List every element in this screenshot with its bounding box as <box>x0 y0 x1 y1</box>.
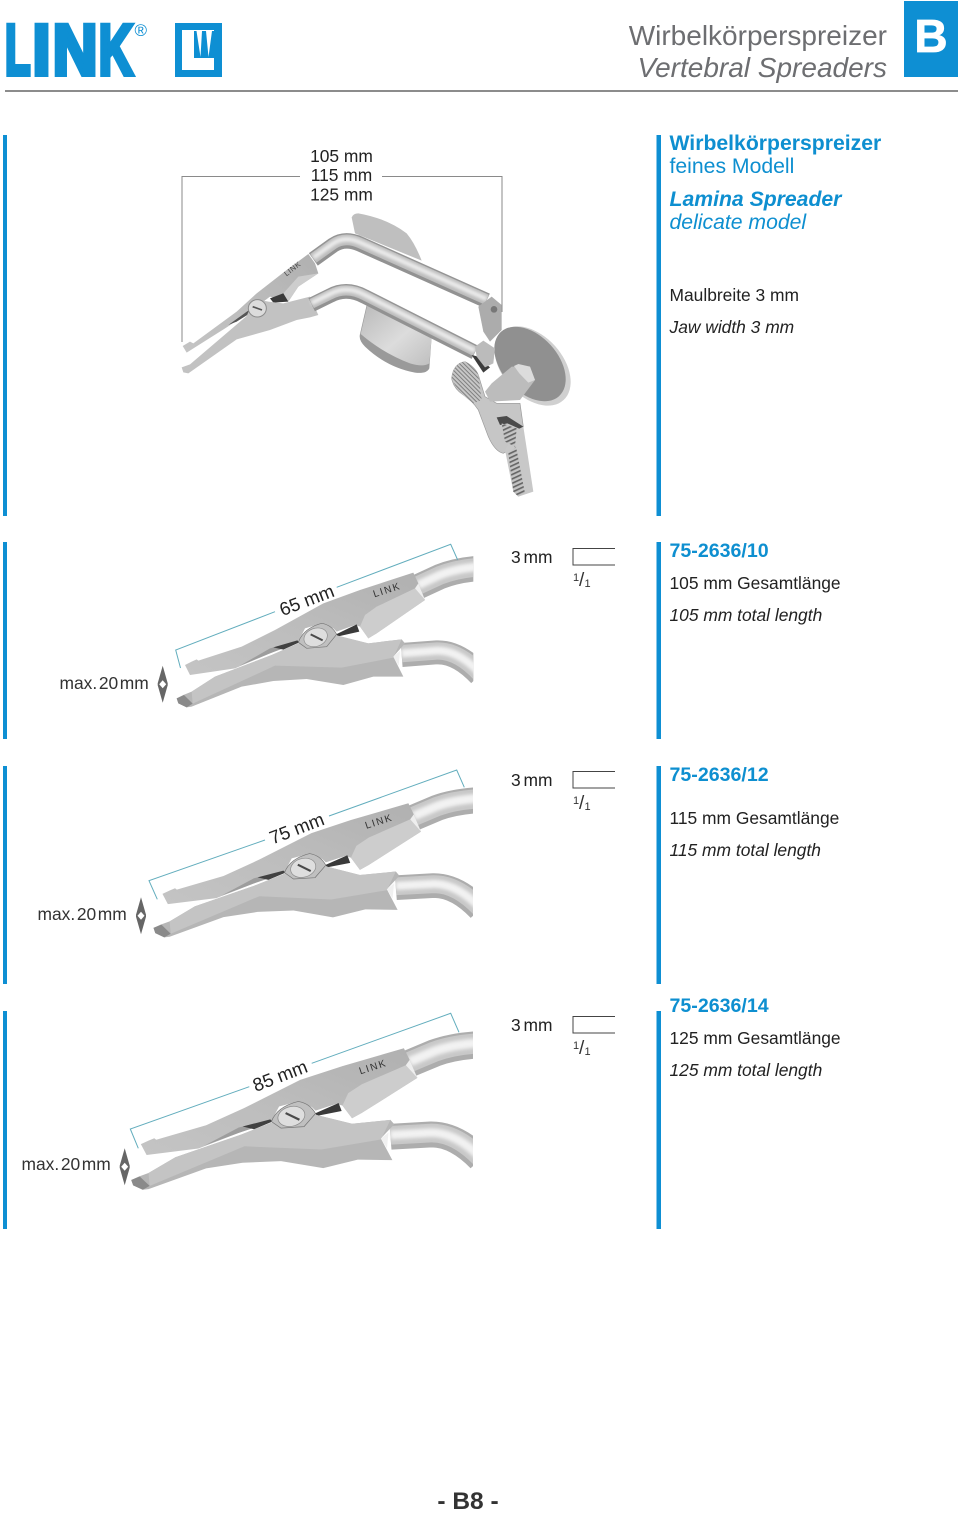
variant 1: order details: 75-2636/10 <box>670 540 769 562</box>
variant 2: jaw width symbol: 1 <box>573 795 579 807</box>
variant 1: forceps tip 65 mm: max. 20 mm <box>60 673 149 693</box>
overview length dimension: 125 mm <box>310 184 373 204</box>
header: LINK logo: I <box>32 12 50 90</box>
variant 3: forceps tip 85 mm: 85 mm <box>250 1056 310 1096</box>
product description: Lamina Spreader <box>670 188 843 211</box>
variant 3: jaw width symbol <box>511 1015 615 1059</box>
variant 3: jaw width symbol: 1 <box>573 1040 579 1052</box>
variant 3: forceps tip 85 mm <box>22 1013 481 1194</box>
variant 1: forceps tip 65 mm <box>60 544 480 707</box>
header: LW logo <box>175 23 222 77</box>
header: LINK logo: L <box>5 12 30 90</box>
overview length dimension: 105 mm <box>310 146 373 166</box>
header rule <box>5 90 958 92</box>
variant 1: forceps tip 65 mm: 65 mm <box>276 580 337 620</box>
variant 1: jaw width symbol: / <box>579 570 585 591</box>
variant 1: jaw width symbol <box>511 547 615 591</box>
header: LINK logo: N <box>53 12 97 90</box>
variant 1: jaw width symbol: 1 <box>573 572 579 584</box>
header: LINK logo: K <box>99 12 133 90</box>
variant 2: forceps tip 75 mm: 75 mm <box>266 808 327 848</box>
product description: feines Modell <box>670 155 794 178</box>
product description: delicate model <box>670 211 807 234</box>
variant 3: jaw width symbol: 3 mm <box>511 1015 552 1035</box>
product description: Maulbreite 3 mm <box>670 285 799 305</box>
header: LINK logo <box>5 12 148 90</box>
product description: Wirbelkörperspreizer <box>670 132 881 155</box>
instrument photo: lamina spreader: LINK <box>282 259 303 278</box>
header title <box>629 20 887 83</box>
overview length dimension: 115 mm <box>311 165 372 185</box>
blue side bars <box>3 135 661 1229</box>
product description <box>668 132 881 337</box>
header: LINK logo: ® <box>134 21 148 40</box>
variant 2: order details: 75-2636/12 <box>670 764 769 786</box>
variant 2: jaw width symbol <box>511 770 615 814</box>
variant 2: order details: 115 mm total length <box>670 840 821 860</box>
product description: Jaw width 3 mm <box>668 317 794 337</box>
section tab B: B <box>914 10 948 62</box>
instrument photo: lamina spreader <box>182 213 586 497</box>
variant 3: forceps tip 85 mm: LINK <box>358 1058 389 1077</box>
header title: Vertebral Spreaders <box>637 52 887 83</box>
variant 1: order details: 105 mm Gesamtlänge <box>670 573 841 593</box>
variant 2: jaw width symbol: / <box>579 793 585 814</box>
variant 1: jaw width symbol: 1 <box>584 578 591 590</box>
variant 3: order details: 125 mm Gesamtlänge <box>670 1028 841 1048</box>
variant 3: forceps tip 85 mm: max. 20 mm <box>22 1154 111 1174</box>
variant 1: forceps tip 65 mm: LINK <box>372 581 403 600</box>
variant 2: forceps tip 75 mm <box>38 770 480 943</box>
overview length dimension <box>182 146 502 342</box>
variant 1: order details <box>670 540 841 625</box>
variant 2: order details: 115 mm Gesamtlänge <box>670 808 839 828</box>
variant 2: order details <box>670 764 839 860</box>
variant 1: jaw width symbol: 3 mm <box>511 547 552 567</box>
variant 3: order details: 75-2636/14 <box>670 995 769 1017</box>
variant 2: forceps tip 75 mm: max. 20 mm <box>38 904 127 924</box>
variant 3: jaw width symbol: 1 <box>584 1046 591 1058</box>
section tab B <box>904 1 958 77</box>
variant 1: order details: 105 mm total length <box>670 605 822 625</box>
variant 2: forceps tip 75 mm: LINK <box>364 812 395 832</box>
variant 2: jaw width symbol: 3 mm <box>511 770 552 790</box>
variant 3: order details: 125 mm total length <box>670 1060 822 1080</box>
variant 3: jaw width symbol: / <box>579 1038 585 1059</box>
variant 2: jaw width symbol: 1 <box>584 801 591 813</box>
header title: Wirbelkörperspreizer <box>629 20 887 51</box>
variant 3: order details <box>670 995 841 1080</box>
